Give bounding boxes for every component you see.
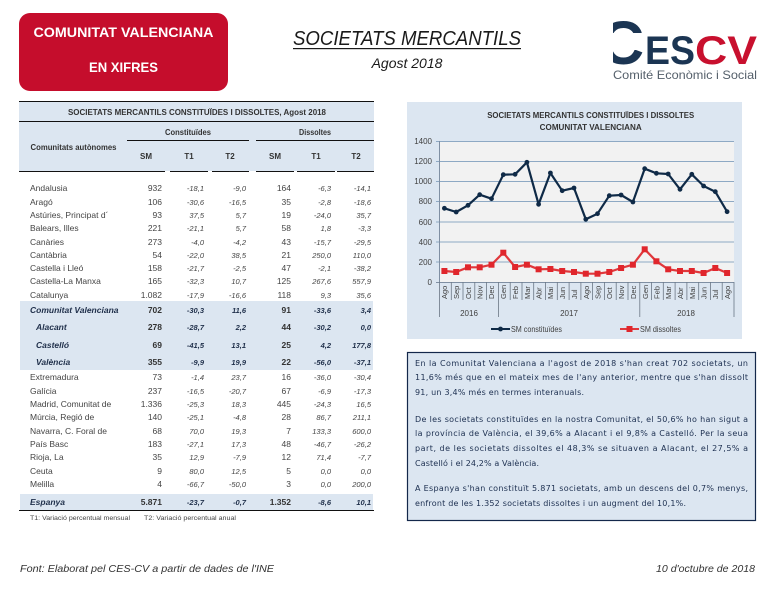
row: Catalunya: -16,6 bbox=[229, 291, 247, 300]
row: Canàries: 273 bbox=[148, 237, 162, 247]
series: SM dissoltes bbox=[441, 246, 730, 277]
row: Extremadura: -36,0 bbox=[314, 373, 332, 382]
row: Cantàbria: 38,5 bbox=[231, 251, 247, 260]
row: Andalusia: -6,3 bbox=[318, 184, 332, 193]
title bbox=[293, 28, 522, 71]
y axis labels: 1400 bbox=[414, 137, 433, 146]
table header: SOCIETATS MERCANTILS CONSTITUÏDES I DISSOLTES, Agost 2018 bbox=[68, 108, 327, 117]
row: Castella i Lleó: -21,7 bbox=[187, 264, 205, 273]
paragraph 2 bbox=[415, 415, 748, 468]
row: Espanya: -23,7 bbox=[187, 498, 205, 507]
row: València: 19,9 bbox=[231, 358, 247, 367]
row: Rioja: Rioja, La bbox=[30, 452, 64, 462]
y axis labels: 1200 bbox=[414, 157, 433, 166]
x axis year labels: 2017 bbox=[560, 309, 578, 318]
row: Galícia: 237 bbox=[148, 386, 162, 396]
logo: CES CV: ES bbox=[645, 29, 695, 73]
row: Espanya: 5.871 bbox=[141, 497, 162, 507]
row: Balears: 221 bbox=[148, 223, 162, 233]
row: Castella-La Manxa: 10,7 bbox=[231, 277, 247, 286]
table header: T2 bbox=[225, 152, 235, 161]
row: Ceuta: 9 bbox=[157, 466, 162, 476]
paragraph 2: part, de les societats dissoltes el 48,3% se situaven a Alacant, el 27,5% a bbox=[415, 444, 748, 453]
row: Catalunya: Catalunya bbox=[30, 290, 69, 300]
table header: T1 bbox=[311, 152, 321, 161]
x axis month labels: Nov bbox=[476, 285, 484, 299]
table header: Constituïdes bbox=[165, 128, 212, 137]
row: Madrid: -24,3 bbox=[314, 400, 332, 409]
table header: SM bbox=[269, 152, 281, 161]
x axis month labels: Abr bbox=[534, 287, 544, 299]
x axis month labels: Feb bbox=[511, 286, 520, 299]
chart legend: SM constituïdes bbox=[511, 325, 562, 334]
row: Aragó: 35 bbox=[282, 197, 291, 207]
x axis month labels: Gen bbox=[499, 285, 508, 299]
row: Galícia: -16,5 bbox=[187, 387, 205, 396]
row: País Basc: 183 bbox=[148, 439, 162, 449]
x axis month labels: Jul bbox=[711, 289, 720, 299]
chart legend bbox=[491, 325, 681, 334]
row: Madrid: Madrid, Comunitat de bbox=[30, 399, 112, 409]
row: Múrcia: -4,8 bbox=[233, 413, 247, 422]
chart title: COMUNITAT VALENCIANA bbox=[540, 123, 642, 132]
row: Extremadura: -1,4 bbox=[191, 373, 204, 382]
row: Andalusia: Andalusia bbox=[30, 183, 68, 193]
title: SOCIETATS MERCANTILS bbox=[293, 28, 522, 50]
table header bbox=[19, 101, 374, 172]
x axis month labels: Sep bbox=[594, 286, 602, 299]
x axis year labels: 2018 bbox=[677, 309, 695, 318]
x axis month labels: Nov bbox=[617, 285, 626, 299]
row: Extremadura: 16 bbox=[282, 372, 291, 382]
row: Ceuta: 5 bbox=[286, 466, 291, 476]
badge: Comunitat Valenciana en xifres: COMUNITAT VALENCIANA bbox=[34, 24, 214, 40]
series: SM constituïdes bbox=[442, 160, 729, 222]
row: Espanya: Espanya bbox=[30, 497, 65, 507]
row: Alacant: -30,2 bbox=[314, 323, 332, 332]
row: Castella-La Manxa: 557,9 bbox=[352, 277, 372, 286]
row: Múrcia: Múrcia, Regió de bbox=[30, 412, 95, 422]
row: Astúries: 19 bbox=[282, 210, 291, 220]
row: Aragó: -30,6 bbox=[187, 198, 205, 207]
row: Canàries: -29,5 bbox=[354, 238, 372, 247]
row: Madrid: -25,3 bbox=[187, 400, 205, 409]
x axis month labels: Mai bbox=[546, 287, 555, 299]
row: Aragó: -2,8 bbox=[318, 198, 332, 207]
badge: Comunitat Valenciana en xifres bbox=[19, 13, 228, 91]
row: Melilla: Melilla bbox=[30, 479, 54, 489]
row: Aragó bbox=[30, 197, 372, 207]
row: Múrcia: -25,1 bbox=[187, 413, 204, 422]
row: País Basc: -46,7 bbox=[314, 440, 332, 449]
row: Melilla: 0,0 bbox=[321, 480, 332, 489]
row: Extremadura: 23,7 bbox=[230, 373, 247, 382]
row: Cantàbria: 21 bbox=[282, 250, 291, 260]
date: 10 d'octubre de 2018 bbox=[656, 563, 755, 575]
paragraph 1 bbox=[415, 359, 748, 397]
row: Extremadura: 73 bbox=[153, 372, 162, 382]
row: Galícia: -6,9 bbox=[318, 387, 332, 396]
row: Madrid: 445 bbox=[277, 399, 291, 409]
row: Andalusia: -9,0 bbox=[233, 184, 247, 193]
row: Galícia: Galícia bbox=[30, 386, 57, 396]
y axis labels: 200 bbox=[419, 258, 433, 267]
x axis month labels: Mai bbox=[688, 287, 697, 299]
row: Espanya: 10,1 bbox=[356, 498, 371, 507]
row: Rioja: 12,9 bbox=[189, 453, 205, 462]
row: Navarra: 70,0 bbox=[189, 427, 205, 436]
row: Balears: 5,7 bbox=[236, 224, 247, 233]
paragraph 1: En la Comunitat Valenciana a l'agost de 2018 s'han creat 702 societats, un bbox=[415, 359, 748, 368]
row: Astúries bbox=[30, 210, 372, 220]
row: Comunitat Valenciana bbox=[30, 305, 372, 315]
row: País Basc: 17,3 bbox=[231, 440, 247, 449]
row: Galícia: -17,3 bbox=[354, 387, 372, 396]
table header: SM bbox=[140, 152, 152, 161]
row: Castella i Lleó bbox=[30, 263, 372, 273]
x axis month labels bbox=[440, 285, 732, 299]
chart legend: SM dissoltes bbox=[640, 325, 681, 334]
row: Rioja: 12 bbox=[282, 452, 291, 462]
row: Catalunya: 35,6 bbox=[356, 291, 372, 300]
row: Madrid: 1.336 bbox=[141, 399, 162, 409]
row: Balears: Balears, Illes bbox=[30, 223, 79, 233]
row: Aragó: Aragó bbox=[30, 197, 53, 207]
row: Navarra: 133,3 bbox=[312, 427, 332, 436]
row: Rioja bbox=[30, 452, 372, 462]
row: Andalusia: -14,1 bbox=[354, 184, 371, 193]
row: Canàries: 43 bbox=[282, 237, 291, 247]
plot area bbox=[440, 141, 734, 282]
row: Cantàbria: Cantàbria bbox=[30, 250, 67, 260]
row: Castelló bbox=[36, 340, 372, 350]
paragraph 1: 11,6% més que en el mateix mes de l'any anterior, mentre que s'han dissolt bbox=[415, 372, 748, 382]
row: Navarra: Navarra, C. Foral de bbox=[30, 426, 107, 436]
row: Castelló: 25 bbox=[282, 340, 291, 350]
row: Castelló: -41,5 bbox=[187, 341, 205, 350]
row: Andalusia: 932 bbox=[148, 183, 162, 193]
row: Castelló: Castelló bbox=[36, 340, 69, 350]
row: Galícia: 67 bbox=[282, 386, 291, 396]
panel: line chart bbox=[407, 102, 742, 339]
row: Extremadura: Extremadura bbox=[30, 372, 79, 382]
row: Castella-La Manxa: Castella-La Manxa bbox=[30, 276, 101, 286]
paragraph 2: De les societats constituïdes en la nostra Comunitat, el 50,6% ho han sigut a bbox=[415, 415, 748, 424]
row: Rioja: -7,9 bbox=[233, 453, 247, 462]
row: Catalunya: -17,9 bbox=[187, 291, 205, 300]
y axis labels: 400 bbox=[419, 238, 433, 247]
row: Múrcia: 86,7 bbox=[316, 413, 332, 422]
paragraph 2: la província de València, el 39,6% a Alacant i el 9,8% a Castelló. Per la seua bbox=[415, 428, 748, 438]
paragraph 3: A Espanya s'han constituït 5.871 societats, amb un descens del 0,7% menys, bbox=[415, 484, 748, 493]
chart title: SOCIETATS MERCANTILS CONSTITUÏDES I DISSOLTES bbox=[487, 111, 695, 120]
row: Astúries: 5,7 bbox=[236, 211, 247, 220]
row: Melilla: 4 bbox=[157, 479, 162, 489]
row: Ceuta bbox=[30, 466, 372, 476]
row: Melilla: 200,0 bbox=[351, 480, 372, 489]
row: Aragó: 106 bbox=[148, 197, 162, 207]
table footnote: T2: Variació percentual anual bbox=[144, 515, 237, 522]
row: Canàries: -4,2 bbox=[233, 238, 247, 247]
paragraph 3: enfront de les 1.352 societats dissoltes i un augment del 10,1%. bbox=[415, 499, 686, 508]
row: València: -37,1 bbox=[354, 358, 371, 367]
row: Balears: -21,1 bbox=[187, 224, 204, 233]
logo: CES CV: CV bbox=[695, 29, 757, 73]
row: Alacant bbox=[35, 322, 372, 332]
row: Navarra: 7 bbox=[286, 426, 291, 436]
table footnote bbox=[30, 515, 237, 522]
row: País Basc: País Basc bbox=[30, 439, 69, 449]
row: Balears: -3,3 bbox=[358, 224, 372, 233]
x axis month labels: Mar bbox=[664, 286, 673, 299]
row: Galícia bbox=[30, 386, 372, 396]
row: Aragó: -18,6 bbox=[354, 198, 372, 207]
row: Castelló: 13,1 bbox=[231, 341, 246, 350]
title: Agost 2018 bbox=[371, 55, 443, 71]
row: Comunitat Valenciana: -33,6 bbox=[314, 306, 332, 315]
logo: CES CV bbox=[613, 21, 757, 79]
row: Espanya bbox=[19, 494, 374, 511]
row: Melilla: -50,0 bbox=[229, 480, 247, 489]
table header: Dissoltes bbox=[299, 128, 331, 137]
x axis month labels: Jun bbox=[700, 287, 708, 299]
row: Rioja: 35 bbox=[153, 452, 162, 462]
y axis labels: 0 bbox=[428, 278, 433, 287]
row: Andalusia: -18,1 bbox=[187, 184, 204, 193]
row: Espanya: 1.352 bbox=[270, 497, 291, 507]
row: Múrcia: 211,1 bbox=[352, 413, 371, 422]
table header: T2 bbox=[351, 152, 361, 161]
row: Melilla bbox=[30, 479, 372, 489]
row: Castelló: 177,8 bbox=[352, 341, 372, 350]
row: Castella-La Manxa: 165 bbox=[148, 276, 162, 286]
row: Catalunya bbox=[30, 290, 372, 300]
row: Ceuta: 0,0 bbox=[321, 467, 332, 476]
row: Castella-La Manxa: 267,6 bbox=[311, 277, 332, 286]
row: País Basc: 48 bbox=[282, 439, 291, 449]
row: Balears: 1,8 bbox=[321, 224, 332, 233]
row: Cantàbria: 54 bbox=[153, 250, 162, 260]
row: Canàries: Canàries bbox=[30, 237, 64, 247]
x axis month labels: Ago bbox=[582, 286, 591, 299]
row: Castella i Lleó: -2,5 bbox=[233, 264, 247, 273]
row: Balears bbox=[30, 223, 372, 233]
row: Catalunya: 118 bbox=[277, 290, 291, 300]
row: Comunitat Valenciana: -30,3 bbox=[187, 306, 205, 315]
row: València: València bbox=[36, 357, 70, 367]
row: Múrcia: 140 bbox=[148, 412, 162, 422]
y axis labels: 800 bbox=[419, 197, 433, 206]
row: Astúries: Astúries, Principat d´ bbox=[30, 210, 109, 220]
row: Comunitat Valenciana: 11,6 bbox=[232, 306, 247, 315]
row: Alacant: -28,7 bbox=[187, 323, 205, 332]
row: València: -9,9 bbox=[191, 358, 205, 367]
row: Alacant: 0,0 bbox=[361, 323, 372, 332]
row: Canàries: -15,7 bbox=[314, 238, 332, 247]
row: Alacant: 278 bbox=[148, 322, 162, 332]
row: Castella i Lleó: 47 bbox=[282, 263, 291, 273]
row: Alacant: 44 bbox=[282, 322, 291, 332]
y axis labels: 600 bbox=[419, 218, 433, 227]
row: Múrcia: 28 bbox=[282, 412, 291, 422]
row: Alacant: 2,2 bbox=[235, 323, 247, 332]
row: Catalunya: 9,3 bbox=[321, 291, 332, 300]
row: Espanya: -0,7 bbox=[233, 498, 247, 507]
row: Navarra: 600,0 bbox=[352, 427, 372, 436]
row: València: -56,0 bbox=[314, 358, 332, 367]
table footnote: T1: Variació percentual mensual bbox=[30, 515, 131, 522]
y axis labels: 1000 bbox=[414, 177, 433, 186]
table: societats mercantils per comunitats bbox=[19, 101, 374, 522]
row: País Basc bbox=[30, 439, 372, 449]
row: Cantàbria: 250,0 bbox=[311, 251, 332, 260]
row: Astúries: 37,5 bbox=[189, 211, 205, 220]
x axis month labels: Dec bbox=[629, 285, 638, 299]
x axis year labels bbox=[460, 309, 695, 318]
paragraph 2: Castelló i el 24,2% a València. bbox=[415, 458, 539, 468]
row: Madrid: 16,5 bbox=[356, 400, 372, 409]
badge: Comunitat Valenciana en xifres: EN XIFRES bbox=[89, 59, 158, 75]
row: Astúries: 35,7 bbox=[356, 211, 372, 220]
row: Castella i Lleó: -38,2 bbox=[354, 264, 372, 273]
row: Navarra: 68 bbox=[153, 426, 162, 436]
row: Rioja: 71,4 bbox=[316, 453, 331, 462]
x axis month labels: Sep bbox=[452, 286, 461, 299]
row: Navarra: 19,3 bbox=[231, 427, 247, 436]
row: Múrcia bbox=[30, 412, 371, 422]
row: Cantàbria: -22,0 bbox=[187, 251, 205, 260]
x axis month labels: Mar bbox=[523, 286, 532, 299]
row: València: 22 bbox=[282, 357, 291, 367]
row: Rioja: -7,7 bbox=[358, 453, 372, 462]
x axis month labels: Ago bbox=[723, 286, 732, 299]
x axis month labels: Jun bbox=[558, 287, 567, 299]
x axis month labels: Abr bbox=[676, 287, 685, 299]
source note: Font: Elaborat pel CES-CV a partir de dades de l'INE bbox=[20, 563, 275, 575]
row: Cantàbria: 110,0 bbox=[353, 251, 372, 260]
row: Comunitat Valenciana: 702 bbox=[148, 305, 162, 315]
row: País Basc: -27,1 bbox=[187, 440, 204, 449]
x axis month labels: Jul bbox=[570, 289, 579, 299]
x axis month labels: Feb bbox=[652, 286, 662, 299]
row: Andalusia: 164 bbox=[277, 183, 291, 193]
row: Castella i Lleó: Castella i Lleó bbox=[30, 263, 84, 273]
x axis month labels: Gen bbox=[641, 285, 650, 299]
paragraph 1: 91, un 3,4% més en termes interanuals. bbox=[415, 387, 584, 397]
x axis month labels: Dec bbox=[487, 285, 496, 299]
row: Extremadura: -30,4 bbox=[354, 373, 371, 382]
x axis ticks bbox=[440, 282, 734, 317]
row: Castelló: 69 bbox=[153, 340, 162, 350]
row: Castella-La Manxa: -32,3 bbox=[187, 277, 205, 286]
row: Alacant: Alacant bbox=[35, 322, 68, 332]
highlighted rows: Comunitat Valenciana bbox=[20, 301, 373, 370]
row: Melilla: -66,7 bbox=[187, 480, 205, 489]
chart title bbox=[487, 111, 695, 132]
row: Comunitat Valenciana: 3,4 bbox=[361, 306, 372, 315]
logo: CES CV: C bbox=[600, 9, 644, 77]
row: Ceuta: 12,5 bbox=[231, 467, 247, 476]
panel: text summary bbox=[408, 352, 756, 520]
row: Andalusia bbox=[30, 183, 371, 193]
row: Astúries: -24,0 bbox=[314, 211, 332, 220]
row: Comunitat Valenciana: Comunitat Valenciana bbox=[30, 305, 119, 315]
row: Extremadura bbox=[30, 372, 371, 382]
row: Aragó: -16,5 bbox=[229, 198, 247, 207]
x axis month labels: Oct bbox=[605, 286, 614, 299]
table header: Comunitats autònomes bbox=[30, 143, 117, 152]
row: Melilla: 3 bbox=[286, 479, 291, 489]
row: Canàries: -4,0 bbox=[191, 238, 205, 247]
row: País Basc: -26,2 bbox=[354, 440, 372, 449]
row: Castella-La Manxa bbox=[30, 276, 372, 286]
row: Castelló: 4,2 bbox=[320, 341, 332, 350]
row: València bbox=[36, 357, 371, 367]
paragraph 3 bbox=[415, 484, 748, 508]
row: Castella i Lleó: -2,1 bbox=[318, 264, 331, 273]
row: Madrid: 18,3 bbox=[231, 400, 247, 409]
row: Comunitat Valenciana: 91 bbox=[282, 305, 291, 315]
row: Astúries: 93 bbox=[153, 210, 162, 220]
row: Ceuta: Ceuta bbox=[30, 466, 53, 476]
row: Canàries bbox=[30, 237, 372, 247]
table header: T1 bbox=[184, 152, 194, 161]
row: Balears: 58 bbox=[282, 223, 291, 233]
row: Ceuta: 0,0 bbox=[361, 467, 372, 476]
row: Madrid bbox=[30, 399, 372, 409]
row: Castella-La Manxa: 125 bbox=[277, 276, 291, 286]
row: Galícia: -20,7 bbox=[229, 387, 247, 396]
x axis month labels: Ago bbox=[440, 286, 449, 299]
row: Castella i Lleó: 158 bbox=[148, 263, 162, 273]
x axis month labels: Oct bbox=[464, 286, 473, 299]
x axis year labels: 2016 bbox=[460, 309, 478, 318]
row: València: 355 bbox=[148, 357, 162, 367]
logo: CES CV: Comité Econòmic i Social bbox=[613, 68, 757, 82]
row: Navarra bbox=[30, 426, 372, 436]
row: Espanya: -8,6 bbox=[318, 498, 332, 507]
row: Cantàbria bbox=[30, 250, 372, 260]
y axis labels bbox=[414, 137, 433, 287]
row: Catalunya: 1.082 bbox=[141, 290, 162, 300]
row: Ceuta: 80,0 bbox=[189, 467, 205, 476]
